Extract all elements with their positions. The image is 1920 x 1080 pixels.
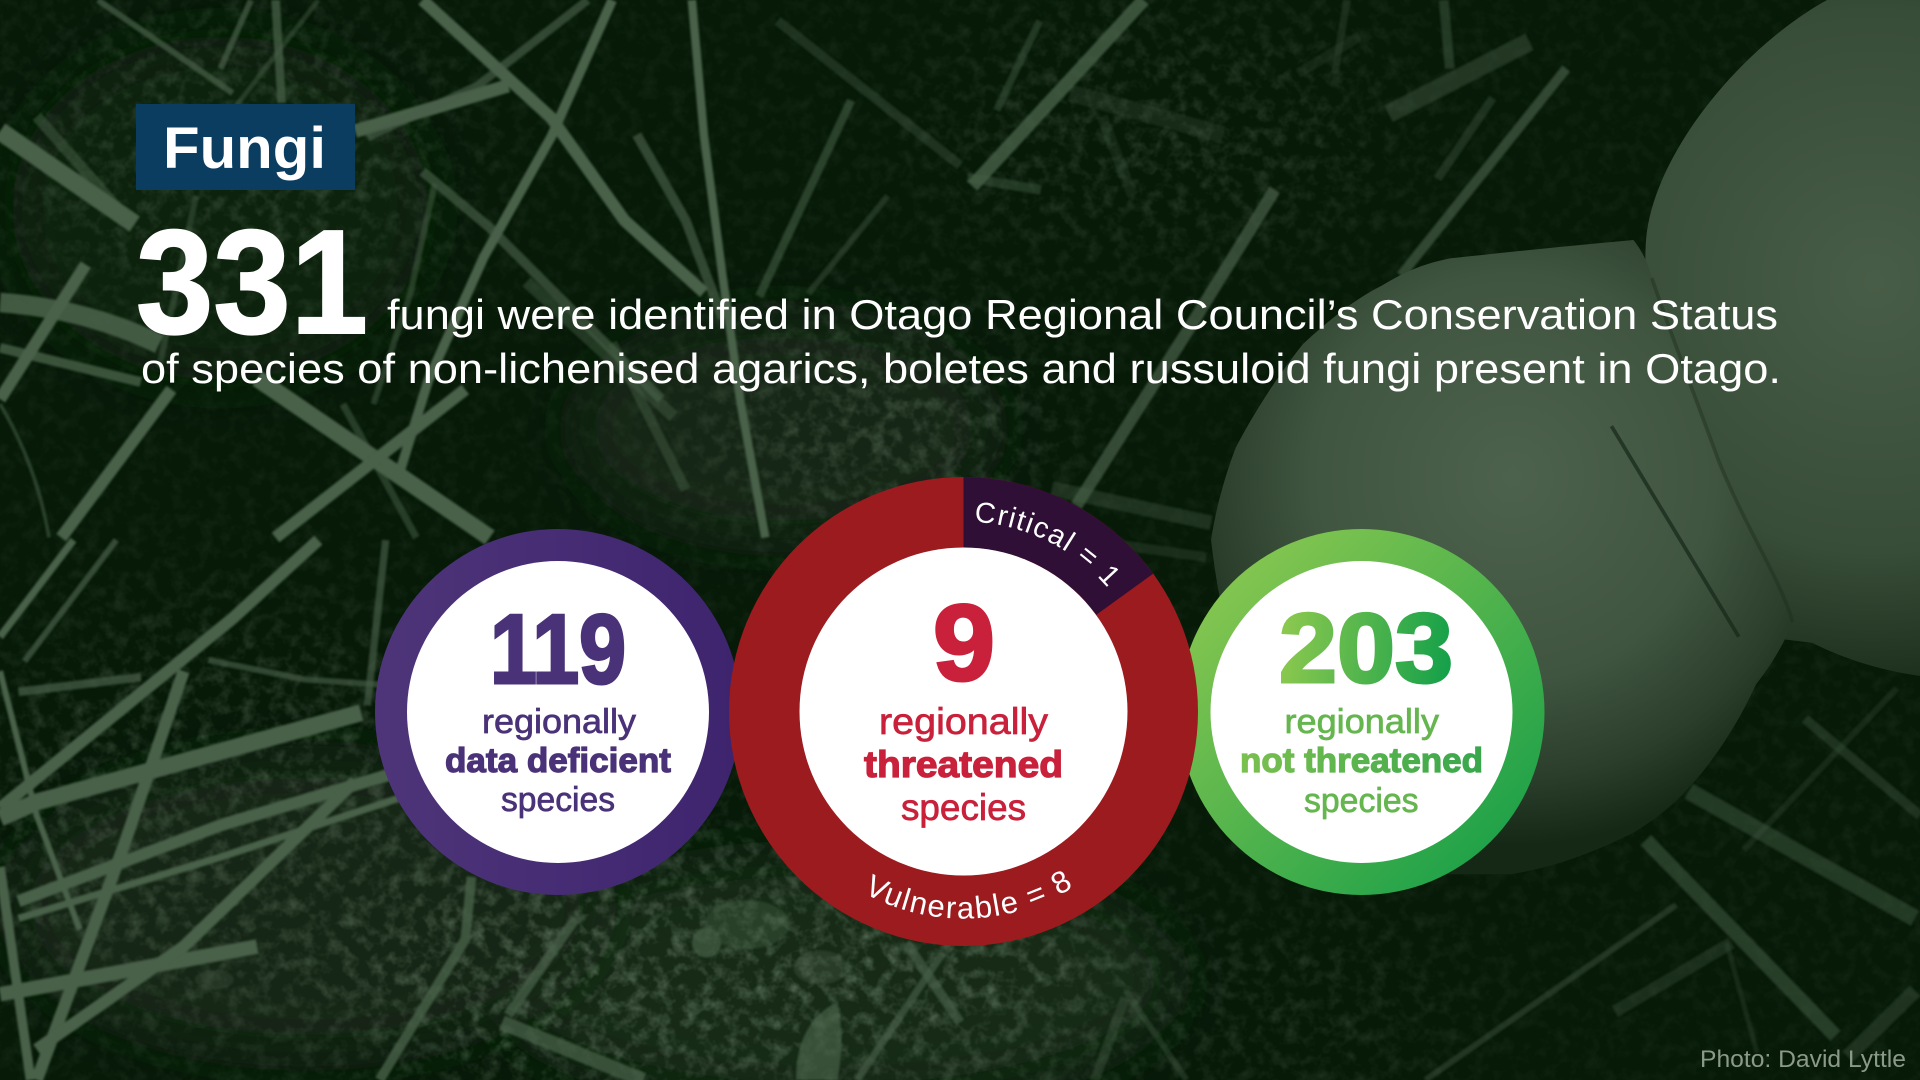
donut segment: critical (964, 477, 1153, 615)
panel: not threatened species: 203 (1279, 593, 1453, 703)
panel: threatened species donut: threatened (864, 744, 1063, 785)
panel: data deficient species (375, 529, 741, 895)
grass blades lower left (0, 540, 960, 1080)
panel: threatened species donut: 9 (933, 582, 995, 703)
intro text: of species of non-lichenised agarics, boletes and russuloid fungi present in Otago. (141, 345, 1781, 392)
panel: not threatened species (1178, 529, 1544, 895)
title badge: Fungi (136, 104, 355, 190)
panel: not threatened species: regionally (1284, 703, 1439, 741)
title badge: Fungi: Fungi (163, 116, 326, 181)
grass blades upper left (0, 0, 960, 538)
grass blades lower right (1095, 688, 1920, 1080)
label: vulnerable count: Vulnerable = 8 (871, 871, 1070, 919)
clover leaves on ground (195, 900, 847, 1080)
panel: data deficient species: 119 (490, 594, 626, 704)
grass blades upper centre and right (967, 0, 1566, 557)
panel: data deficient species: data deficient (445, 742, 671, 780)
panel: data deficient species: regionally (482, 703, 636, 741)
label: critical count: Critical = 1 (976, 502, 1118, 587)
panel: threatened species donut: regionally (879, 701, 1049, 742)
intro text: fungi were identified in Otago Regional Council’s Conservation Status (387, 291, 1778, 338)
intro text (141, 291, 1781, 392)
headline number 331: 331 (136, 200, 368, 365)
panel: threatened species donut (729, 477, 1198, 946)
panel: threatened species donut: species (901, 787, 1026, 828)
mushroom caps (1211, 0, 1920, 874)
panel: data deficient species: species (501, 781, 615, 819)
photo credit: Photo: David Lyttle (1700, 1046, 1906, 1073)
panel: not threatened species: not threatened (1240, 742, 1483, 780)
panel: not threatened species: species (1304, 782, 1418, 820)
